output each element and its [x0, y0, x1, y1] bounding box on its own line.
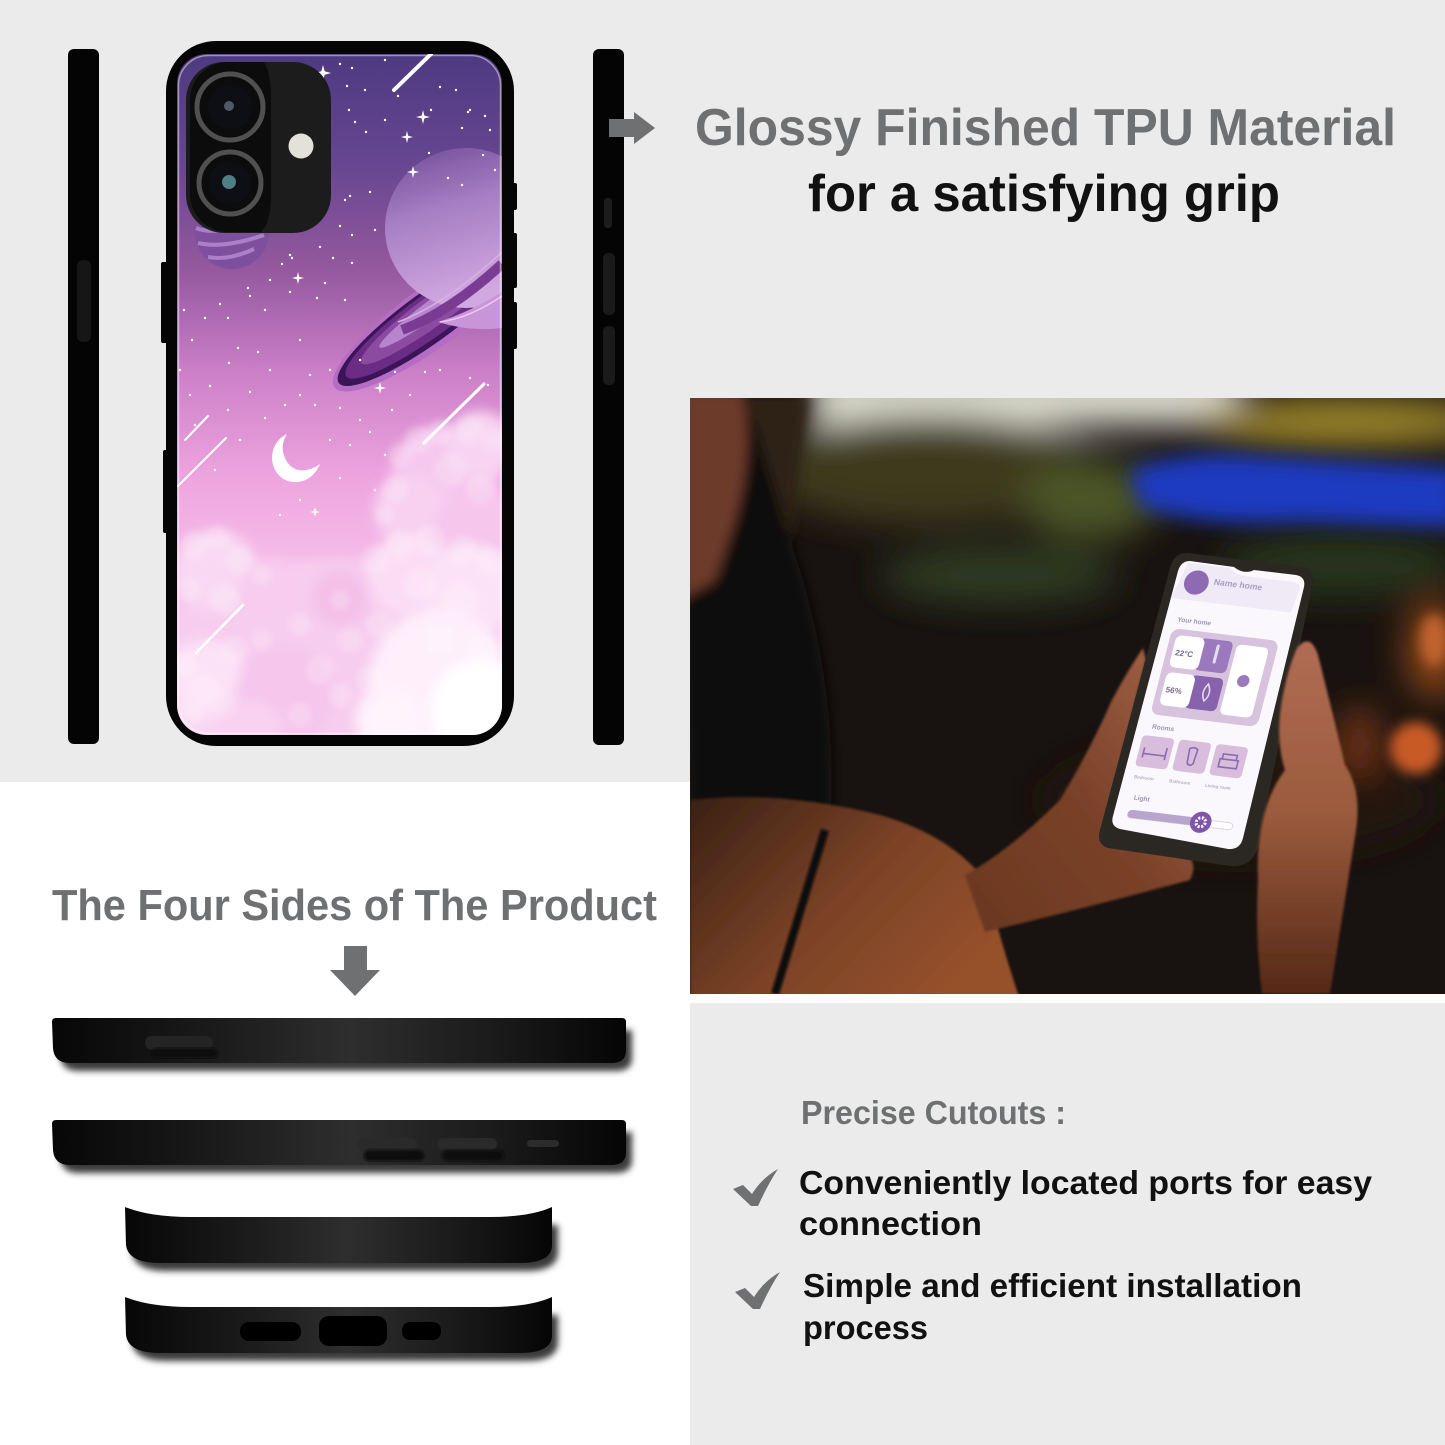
climate panel: 22°C	[1174, 648, 1194, 659]
left hand	[965, 648, 1193, 932]
left side view of case	[68, 49, 99, 744]
feature text: installation: process	[803, 1309, 928, 1346]
feature text: ports	[799, 1164, 1373, 1242]
climate panel	[1150, 628, 1279, 727]
avatar	[1184, 570, 1209, 595]
small striped planet	[195, 226, 268, 269]
feature text: installation: Simple and efficient installation	[803, 1267, 1302, 1304]
heading: glossy material	[695, 99, 1396, 223]
woman hair and head	[690, 398, 834, 804]
crescent moon	[272, 434, 320, 482]
app interface	[1127, 563, 1300, 833]
app interface: Bedroom	[1133, 774, 1154, 781]
right side view of case	[593, 49, 624, 745]
case side buttons	[161, 183, 517, 533]
phone screen	[1112, 561, 1304, 849]
app interface: Your home	[1177, 617, 1212, 627]
blurred scenery	[690, 370, 1445, 994]
app interface: Rooms	[1151, 724, 1175, 733]
icon: check mark one	[733, 1169, 778, 1206]
right hand	[1257, 641, 1358, 994]
feature text: ports: Conveniently located ports for easy	[799, 1164, 1373, 1201]
ring front	[402, 264, 502, 330]
room icons	[1141, 746, 1240, 770]
side view bar: top edge	[125, 1207, 558, 1271]
app interface: Bathroom	[1168, 778, 1191, 786]
case black frame	[166, 41, 514, 746]
app interface: Living room	[1204, 783, 1231, 791]
heading: glossy material: for a satisfying grip	[808, 165, 1280, 223]
ringed planet	[333, 148, 502, 392]
panel: material heading background	[690, 0, 1445, 398]
app interface: Name home	[1213, 577, 1264, 592]
cloud puffs	[173, 416, 504, 727]
heading: four sides: The Four Sides of The Product	[52, 881, 657, 930]
glossy inner edge highlight	[178, 56, 500, 734]
woman shoulder	[690, 797, 1020, 1000]
clouds	[177, 404, 502, 735]
side view bar: bottom edge with port cutouts	[125, 1297, 558, 1361]
side view bar: left edge	[52, 1018, 632, 1071]
app header	[1171, 562, 1303, 613]
top strap	[775, 830, 825, 994]
feature text: ports: connection	[799, 1205, 982, 1242]
heading: precise cutouts: Precise Cutouts :	[801, 1094, 1066, 1131]
camera module	[186, 62, 331, 233]
planet body	[385, 148, 502, 308]
light slider	[1127, 810, 1234, 833]
ring back	[333, 291, 474, 392]
upper lens	[197, 74, 263, 140]
heading: glossy material: Glossy Finished TPU Material	[695, 99, 1396, 157]
shooting stars	[178, 54, 484, 653]
smartphone	[1099, 553, 1313, 866]
panel: cutouts background	[690, 1003, 1445, 1445]
app interface: Light	[1133, 795, 1151, 804]
lower lens	[199, 152, 261, 214]
printed space artwork	[177, 54, 502, 735]
side view bar: right edge	[52, 1120, 632, 1173]
room tiles	[1135, 735, 1249, 779]
photo: woman holding phone	[680, 370, 1445, 1000]
flash	[288, 134, 314, 158]
stars	[180, 60, 495, 515]
climate panel: 56%	[1165, 685, 1184, 696]
sparkles	[292, 65, 430, 517]
feature text: installation	[803, 1267, 1302, 1346]
arrow: pointing to material heading	[609, 112, 655, 144]
panel: product views background	[0, 0, 690, 782]
icon: check mark two	[735, 1272, 780, 1309]
arrow: pointing down to side views	[330, 946, 380, 996]
phone case back view	[161, 41, 517, 746]
